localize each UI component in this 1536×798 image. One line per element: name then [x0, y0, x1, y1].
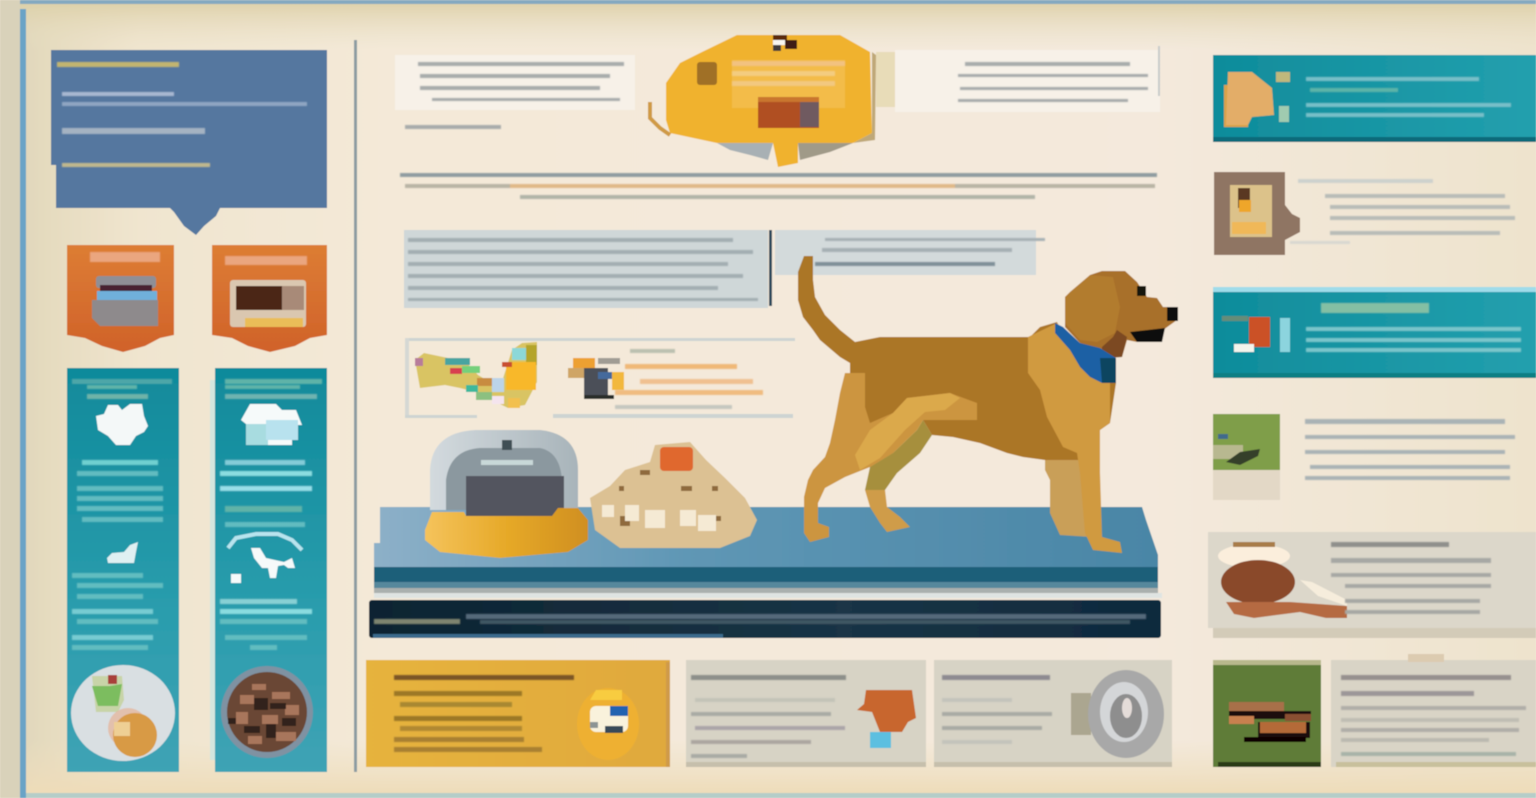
dog: nose: [1167, 307, 1178, 321]
icon: plate with food: [71, 665, 175, 761]
illegible text lines: [1290, 179, 1515, 244]
panel: orange card 1 with food container: [67, 245, 174, 352]
panel: teal column left: [67, 368, 179, 772]
icon: small jar: [568, 358, 624, 399]
icon: small badge: [773, 35, 797, 51]
text block: top left of centre: [395, 55, 635, 129]
illegible text lines: [1306, 303, 1521, 352]
icon: food container: [92, 276, 158, 326]
icon: food jar: [1230, 185, 1272, 237]
icon: yellow jar: [917, 60, 955, 112]
dog: head: [1065, 271, 1177, 358]
dog: body: [798, 256, 1116, 480]
panel: grey text block left: [404, 230, 768, 308]
illegible text lines: [1306, 77, 1511, 117]
illegible orange text: [615, 349, 763, 409]
panel: photo tile with text: [1213, 414, 1515, 500]
panel: grey text card bottom right: [1331, 654, 1536, 767]
icon: colourful food map: [415, 342, 537, 408]
illegible text lines, right teal column: [220, 379, 322, 650]
panel: blue callout, top left: [51, 50, 327, 235]
icon: food bag: [1224, 72, 1290, 127]
panel: yellow card bottom: [366, 660, 670, 767]
icon: round yellow badge: [577, 688, 639, 760]
icon: covered food dish with yellow base: [425, 430, 588, 558]
illegible text lines, left teal column: [72, 379, 172, 650]
panel: brown tile with text: [1214, 172, 1515, 255]
icon: food box: [758, 97, 819, 128]
panel: grey card with scoop icon: [1208, 532, 1536, 638]
illegible banner text: [374, 614, 1146, 624]
icon: food tray: [230, 280, 306, 327]
illegible text lines: [1331, 542, 1491, 614]
icon: wooden chew sticks: [1229, 702, 1311, 742]
dog: far hind leg: [865, 420, 932, 532]
panel: green photo with logs: [1213, 660, 1321, 767]
icon: white splash: [96, 404, 148, 445]
panel: nutrition diagram box: [405, 338, 795, 418]
icon: bowl of kibble: [221, 666, 313, 758]
panel: teal card top right: [1213, 55, 1536, 142]
panel: teal column right: [215, 368, 327, 772]
icon: silver bowl: [1071, 670, 1164, 758]
dog: cheek: [1102, 330, 1127, 358]
icon: dog in field photo: [1213, 414, 1280, 470]
divider: vertical line: [354, 40, 357, 772]
icon: kibble pile with meat topping: [590, 442, 757, 548]
panel: grey text block right: [775, 230, 1045, 275]
heading: wide central text lines: [400, 173, 1157, 199]
illegible card text: [394, 675, 574, 752]
dog: ear: [1065, 275, 1120, 342]
dog: collar: [1055, 323, 1116, 383]
illegible text lines in blue callout: [57, 62, 307, 167]
dog: thigh highlight: [855, 393, 960, 470]
illegible text in bubble: [732, 60, 845, 108]
dog: near hind leg: [804, 373, 977, 542]
dog: far foreleg: [1045, 455, 1092, 537]
icon: dog under arch: [228, 534, 302, 583]
strip: pale edge beside right teal column: [210, 380, 215, 760]
dog: shoulder and near foreleg: [1028, 323, 1122, 553]
icon: orange food block: [1222, 316, 1290, 352]
icon: kibble scoop: [1218, 542, 1347, 618]
panel: grey card with silver bowl: [934, 660, 1172, 767]
bubble shadow: [717, 143, 773, 160]
platform: blue stage: [374, 507, 1162, 598]
panel: teal card middle right: [1213, 287, 1536, 378]
illegible text lines: [1305, 419, 1515, 480]
callout: yellow speech bubble: [650, 35, 906, 167]
icon: meat drumstick: [857, 690, 916, 748]
panel: grey card with meat icon: [686, 660, 926, 767]
panel: orange card 2 with food tray: [212, 245, 327, 352]
dog: mouth: [1130, 328, 1165, 342]
dog: eye: [1137, 286, 1146, 296]
icon: food pile: [241, 404, 302, 445]
divider: dark vertical bar: [769, 230, 772, 306]
icon: small dog: [107, 542, 138, 563]
banner: dark strip under platform: [369, 600, 1161, 638]
illustration: standing brown dog: [798, 256, 1178, 553]
text block: top right of centre: [895, 46, 1160, 112]
